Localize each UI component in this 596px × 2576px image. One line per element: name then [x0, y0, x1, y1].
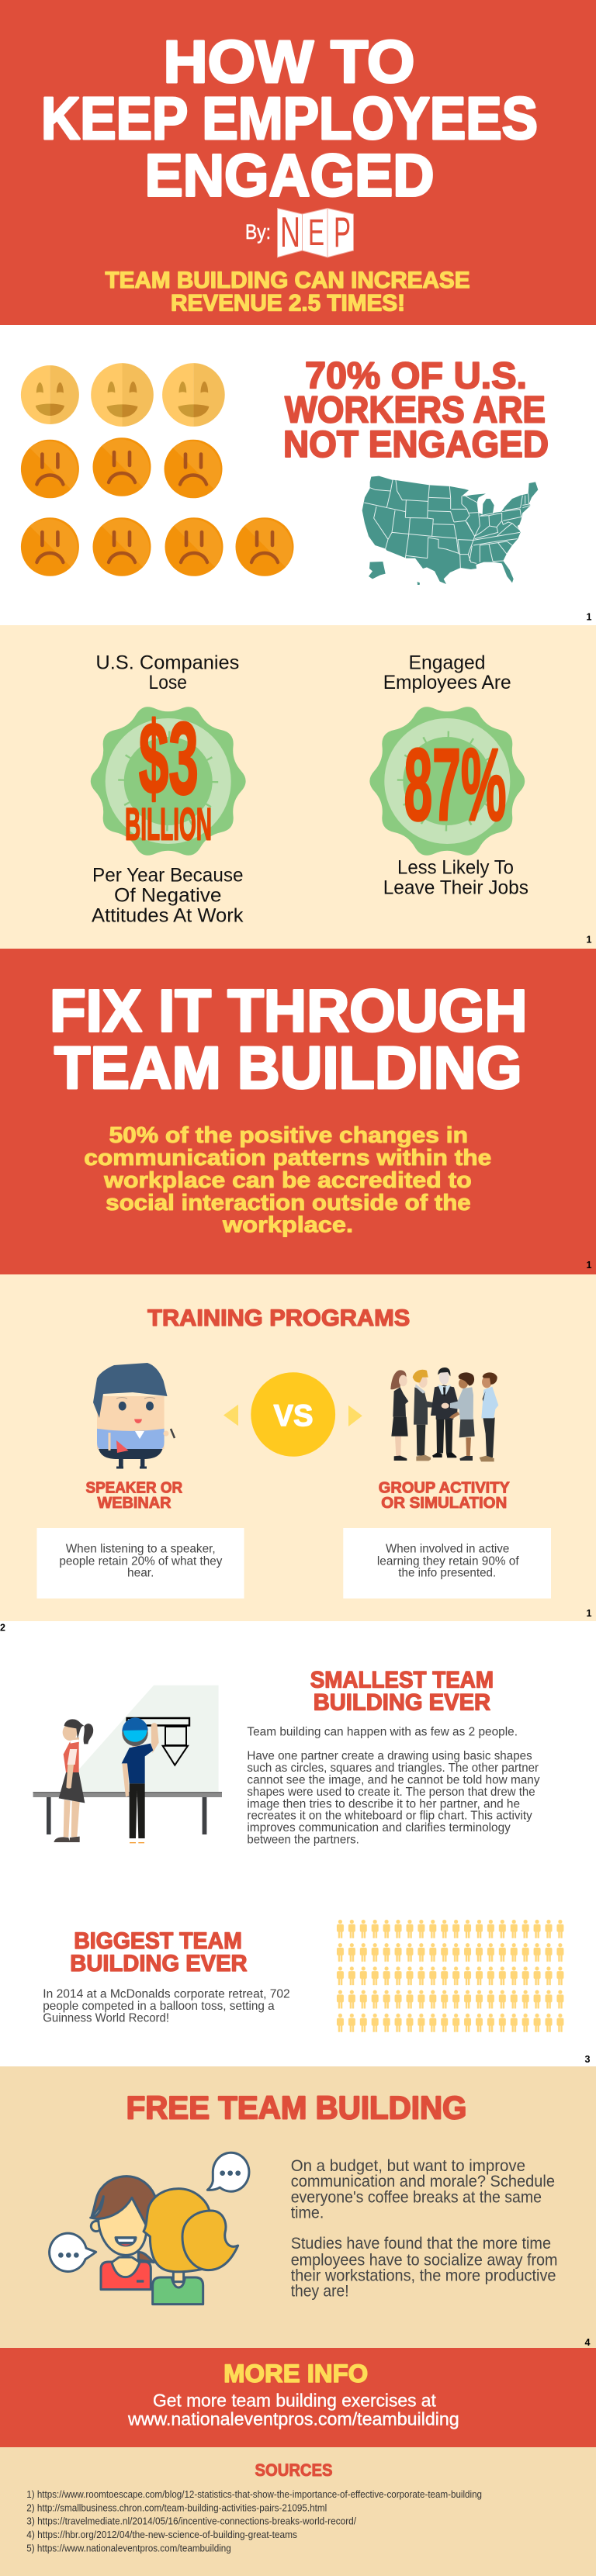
heading: biggest team building [70, 1928, 248, 1976]
label: speaker or webinar: SPEAKER OR [85, 1480, 183, 1497]
heading: 70 percent: 70% OF U.S. [305, 356, 527, 397]
text: biggest team description: Guinness World Record! [43, 2011, 169, 2024]
text: smallest team description: improves communication and clarifies terminology [247, 1821, 511, 1834]
panel: costs [0, 625, 596, 949]
panel: fix it [0, 949, 596, 1274]
panel: header [0, 0, 596, 325]
icon: speaker cartoon [93, 1363, 175, 1469]
heading: sources: SOURCES [255, 2460, 332, 2480]
icon: US map [362, 476, 538, 585]
heading: biggest team building: BIGGEST TEAM [74, 1928, 242, 1954]
subtitle: REVENUE 2.5 TIMES! [171, 290, 405, 316]
card: active learning retention: the info presented. [398, 1567, 496, 1580]
title: KEEP EMPLOYEES [41, 85, 538, 152]
icon: NEP logo: E [308, 213, 324, 254]
panel: more info [0, 2348, 596, 2447]
label: group activity: OR SIMULATION [381, 1495, 507, 1512]
arrow: left [224, 1405, 238, 1426]
text: on a budget: time. [291, 2204, 324, 2222]
heading: 70 percent [283, 356, 549, 465]
text: per year: Attitudes At Work [92, 904, 244, 926]
heading: 70 percent: NOT ENGAGED [283, 424, 549, 465]
text: on a budget: On a budget, but want to improve [291, 2157, 525, 2175]
page number: 1 [587, 935, 591, 946]
text: smallest team description: shapes were used to create it. The person that drew the [247, 1786, 535, 1799]
text: biggest team description: In 2014 at a McDonalds corporate retreat, 702 [43, 1988, 290, 2001]
list: source links: 5) https://www.nationaleventpros.com/teambuilding [26, 2543, 231, 2554]
text: engaged employees [383, 652, 511, 693]
icon: seven unhappy faces [21, 437, 294, 576]
text: more exercises link: Get more team building exercises at [153, 2391, 436, 2411]
text: per year: Per Year Because [92, 865, 244, 887]
heading: smallest team building [310, 1668, 494, 1716]
page number: 1 [587, 1608, 591, 1619]
list: source links: 1) https://www.roomtoescape.com/blog/12-statistics-that-show-the-importance-of-effective-corporate-team-building [26, 2489, 482, 2500]
card: speaker retention: When listening to a speaker, [66, 1543, 216, 1556]
text: per year: Of Negative [114, 884, 222, 906]
text: smallest team description: cannot see the image, and he cannot be told how many [247, 1773, 540, 1786]
text: per year [92, 865, 244, 926]
text: companies lose: U.S. Companies [95, 652, 239, 673]
text: 50 percent stat: workplace. [222, 1213, 353, 1238]
text: biggest team description: people competed in a balloon toss, setting a [43, 2000, 275, 2013]
text: studies have found: employees have to socialize away from [291, 2252, 557, 2270]
panel: training programs [0, 1274, 596, 1621]
text: smallest team description: such as circles, squares and triangles. The other partner [247, 1762, 539, 1775]
label: group activity: GROUP ACTIVITY [379, 1480, 510, 1497]
icon: NEP logo [278, 208, 354, 258]
badge: 87 percent [369, 707, 525, 856]
heading: free team building: FREE TEAM BUILDING [126, 2089, 466, 2125]
list: source links [26, 2489, 482, 2554]
text: smallest team description: image then tries to describe it to her partner, and he [247, 1797, 520, 1810]
card: active learning retention: When involved in active [386, 1543, 509, 1556]
text: less likely [383, 857, 528, 899]
text: 50 percent stat: communication patterns within the [84, 1146, 491, 1170]
text: studies have found: Studies have found that the more time [291, 2235, 551, 2253]
text: smallest team description [247, 1726, 540, 1847]
text: smallest team description: recreates it on the whiteboard or flip chart. This activity [247, 1810, 532, 1823]
subtitle: TEAM BUILDING CAN INCREASE [106, 268, 470, 293]
illustration: whiteboard pair [33, 1686, 222, 1843]
panel: team building records [0, 1621, 596, 2066]
heading: fix it: TEAM BUILDING [54, 1035, 522, 1101]
badge: 3 billion: $3 [139, 701, 199, 815]
label: speaker or webinar [85, 1480, 183, 1512]
icon: three happy faces [21, 363, 225, 427]
text: companies lose: Lose [149, 672, 187, 693]
arrow: right [348, 1406, 362, 1426]
list: source links: 4) https://hbr.org/2012/04/the-new-science-of-building-great-teams [26, 2529, 297, 2540]
text: 50 percent stat: social interaction outside of the [106, 1191, 471, 1215]
text: on a budget: everyone's coffee breaks at the same [291, 2188, 542, 2206]
text: engaged employees: Engaged [408, 652, 486, 673]
text: less likely: Leave Their Jobs [383, 877, 528, 899]
title: HOW TO [163, 29, 414, 95]
text: studies have found: their workstations, the more productive [291, 2267, 556, 2285]
icon: VS circle: VS [273, 1399, 314, 1433]
icon: VS circle [251, 1372, 335, 1457]
icon: business team [390, 1368, 498, 1461]
label: speaker or webinar: WEBINAR [98, 1495, 172, 1512]
card: speaker retention: people retain 20% of what they [59, 1554, 222, 1568]
badge: 3 billion: BILLION [125, 799, 212, 849]
text: more exercises link: www.nationaleventpros.com/teambuilding [127, 2409, 459, 2429]
card: active learning retention: learning they retain 90% of [377, 1554, 519, 1568]
text: smallest team description: Have one partner create a drawing using basic shapes [247, 1749, 532, 1762]
page number: 3 [585, 2054, 590, 2065]
page number: 2 [0, 1623, 5, 1634]
list: source links: 2) http://smallbusiness.chron.com/team-building-activities-pairs-21095.html [26, 2502, 327, 2513]
text: 50 percent stat [84, 1123, 491, 1238]
text: less likely: Less Likely To [397, 857, 514, 879]
card: speaker retention: hear. [127, 1567, 154, 1580]
illustration: chatting coworkers [50, 2152, 249, 2305]
panel: sources [0, 2447, 596, 2576]
heading: smallest team building: BUILDING EVER [314, 1689, 490, 1716]
panel: not engaged [0, 325, 596, 625]
list: source links: 3) https://travelmediate.nl/2014/05/16/incentive-connections-breaks-world-record/ [26, 2516, 356, 2527]
text: studies have found: they are! [291, 2283, 349, 2301]
heading: fix it [50, 978, 528, 1101]
text: 50 percent stat: workplace can be accredited to [103, 1168, 472, 1193]
icon: NEP logo: N [280, 208, 300, 256]
text: biggest team description [43, 1988, 290, 2024]
text: engaged employees: Employees Are [383, 672, 511, 693]
text: companies lose [95, 652, 239, 693]
pictogram: grid of people [334, 1920, 566, 2032]
panel: free team building [0, 2066, 596, 2348]
text: smallest team description: Team building can happen with as few as 2 people. [247, 1726, 518, 1739]
subtitle [106, 268, 470, 316]
page number: 1 [587, 1260, 591, 1271]
page number: 4 [585, 2337, 590, 2348]
title: ENGAGED [144, 143, 435, 209]
card: speaker retention [37, 1528, 244, 1599]
heading: fix it: FIX IT THROUGH [50, 978, 528, 1045]
heading: biggest team building: BUILDING EVER [70, 1951, 248, 1976]
heading: training programs: TRAINING PROGRAMS [147, 1305, 410, 1331]
text: 50 percent stat: 50% of the positive changes in [109, 1123, 468, 1148]
heading: smallest team building: SMALLEST TEAM [310, 1668, 494, 1693]
text: on a budget: communication and morale? Schedule [291, 2173, 555, 2190]
card: active learning retention [343, 1528, 551, 1599]
text: on a budget [291, 2157, 555, 2222]
heading: 70 percent: WORKERS ARE [285, 390, 546, 431]
title [41, 29, 538, 209]
badge: 3 billion [91, 701, 246, 856]
text: studies have found [291, 2235, 557, 2301]
text: more exercises link [127, 2391, 459, 2429]
page number: 1 [587, 611, 591, 622]
byline: By: [245, 220, 271, 244]
icon: NEP logo: P [334, 208, 351, 256]
text: smallest team description: between the partners. [247, 1834, 359, 1847]
heading: more info: MORE INFO [224, 2360, 368, 2388]
label: group activity [379, 1480, 510, 1512]
